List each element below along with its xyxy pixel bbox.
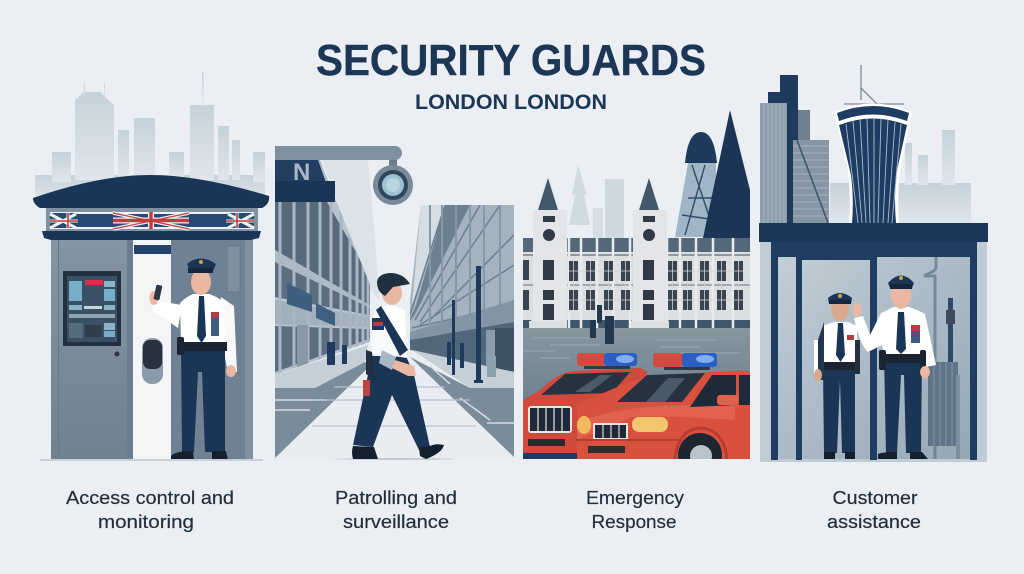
caption: access control: monitoring: [98, 511, 194, 532]
access screen: [63, 271, 121, 346]
infographic canvas: [33, 44, 988, 532]
panel: patrolling and surveillance: [275, 146, 514, 460]
caption: emergency: Response: [592, 511, 676, 532]
Westminster building: [523, 178, 750, 328]
street and walkway: [275, 342, 514, 460]
booth: [51, 237, 253, 460]
red response cars: [523, 368, 750, 459]
panel: access control and monitoring: [33, 72, 269, 461]
emergency light bars: [577, 353, 717, 370]
street lamp and pedestrians: [327, 266, 496, 383]
panel: customer assistance: [759, 65, 988, 462]
panel: emergency response: [523, 110, 750, 477]
plaza: [523, 328, 750, 408]
smaller guard: [814, 293, 860, 459]
CCTV camera: [275, 146, 413, 205]
shelter: [759, 223, 988, 462]
guard with radio: [150, 258, 237, 460]
taller guard waving: [852, 276, 936, 459]
title: SECURITY GUARDS: [316, 36, 706, 85]
caption: customer: assistance: [827, 511, 921, 532]
light beam: [322, 160, 380, 300]
caption: access control: Access control and: [66, 487, 234, 508]
caption: customer: Customer: [832, 487, 918, 508]
left building: [275, 160, 370, 375]
CCTV camera: N: [293, 159, 310, 186]
walking guard: [335, 273, 455, 460]
background skyline: [830, 130, 971, 223]
background skyline and towers: [569, 110, 750, 239]
roof with flag band: [33, 175, 269, 240]
office towers: [760, 75, 829, 223]
subtitle: LONDON LONDON: [415, 91, 607, 114]
ground line: [40, 459, 263, 461]
caption: patrolling: surveillance: [343, 511, 449, 532]
background skyline: [35, 72, 265, 200]
distant guards: [590, 305, 614, 344]
caption: patrolling: Patrolling and: [335, 487, 457, 508]
right building: [410, 205, 514, 376]
caption: emergency: Emergency: [586, 487, 685, 508]
Walkie Talkie tower: [834, 65, 912, 223]
